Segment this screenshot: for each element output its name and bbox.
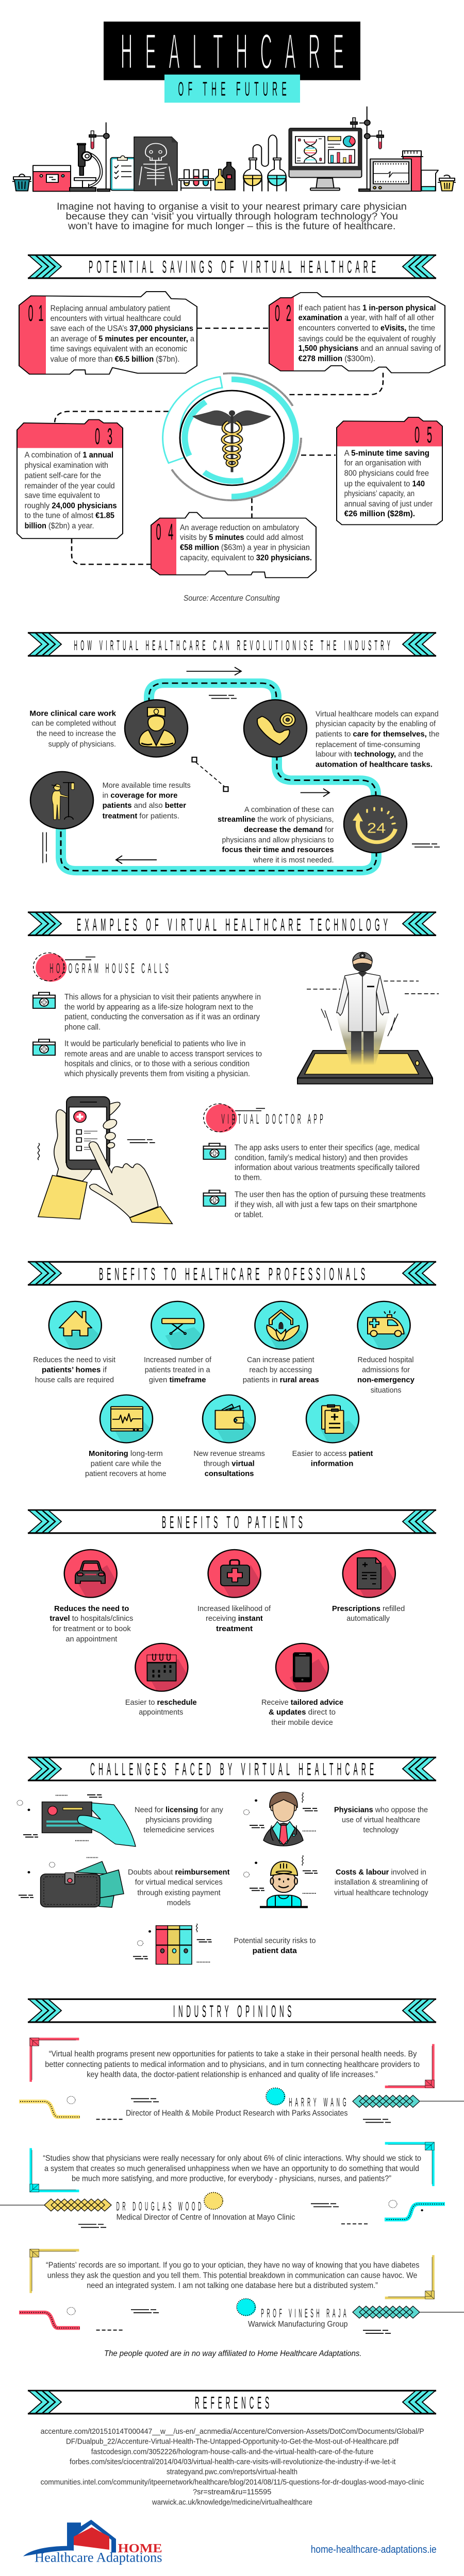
section banner: industry opinions: INDUSTRY OPINIONS: [173, 2003, 291, 2021]
icon: retort stand right: [351, 107, 384, 191]
speaker: Harry Wang: Director of Health & Mobile Product Research with Parks Associates: [126, 2109, 347, 2117]
benefit: reschedule: Easier to reschedule: [125, 1698, 197, 1707]
quote: Vinesh Raja: [29, 2249, 464, 2329]
panel: saving 02: 02: [275, 301, 291, 326]
speaker: Douglas Wood: Medical Director of Centre of Innovation at Mayo Clinic: [117, 2213, 295, 2222]
icon: nurse: [125, 700, 188, 757]
benefit: patients homes: patients’ homes if: [42, 1366, 107, 1374]
benefit: revenue: [193, 1395, 265, 1478]
text: app description 1: [235, 1143, 420, 1182]
section banner: examples: EXAMPLES OF VIRTUAL HEALTHCARE TECHNOLOGY: [77, 916, 388, 935]
text: hologram description 1: the world by appearing as a life-size hologram next to the: [64, 1003, 253, 1011]
panel: saving 05: up the equivalent to 140: [344, 479, 425, 488]
subheading: virtual doctor app: VIRTUAL DOCTOR APP: [221, 1112, 323, 1127]
text: more available time: treatment for patients.: [103, 812, 179, 820]
icon: 24 hour clock: [344, 795, 407, 853]
panel: saving 02: [269, 291, 445, 375]
speaker: Douglas Wood: [0, 2192, 295, 2222]
illustration: hands holding phone: [38, 1097, 172, 1224]
challenge: licensing: Need for licensing for any: [135, 1806, 223, 1814]
text: expand physician capacity: Virtual healthcare models can expand: [316, 710, 439, 718]
icon: clipboards: [322, 1405, 343, 1433]
benefit: travel: [49, 1549, 133, 1643]
benefit: patients homes: Reduces the need to visit: [33, 1355, 116, 1364]
references list: DF/Dualpub_22/Accenture-Virtual-Health-The-Untapped-Opportunity-to-Get-the-Most-out-of-Healthcare.pdf: [66, 2437, 399, 2446]
challenge: reimbursement: for virtual medical services: [135, 1878, 223, 1887]
title: [104, 22, 360, 103]
text: app description 1: to them.: [235, 1173, 262, 1182]
intro text: won’t have to imagine for much longer – this is the future of healthcare.: [68, 221, 396, 232]
panel: saving 05: 05: [415, 422, 432, 448]
speaker: Douglas Wood: DR DOUGLAS WOOD: [117, 2199, 201, 2213]
references list: forbes.com/sites/ciocentral/2014/04/03/virtual-health-care-visits-will-revolutionize-the-industry-if-we-let-it: [70, 2458, 396, 2466]
benefit: monitoring: [85, 1395, 167, 1478]
references list: [41, 2428, 424, 2506]
text: hologram description 1: phone call.: [64, 1023, 101, 1031]
benefit: monitoring: patient care while the: [91, 1460, 161, 1468]
text: expand physician capacity: labour with technology, and the: [316, 750, 423, 759]
challenge: costs and labour: virtual healthcare technology: [334, 1889, 428, 1897]
text: hologram description 1: patient, conducting the conversation as if it was an ordinary: [64, 1012, 260, 1021]
panel: saving 03: billion ($2bn) a year.: [25, 521, 94, 530]
icon: bottles: [215, 162, 235, 190]
text: a combination of these: [218, 805, 334, 865]
benefit: patients homes: [33, 1301, 116, 1384]
panel: saving 03: patient self-care for the: [25, 471, 101, 480]
icon: smartphone: [293, 1653, 311, 1682]
benefit: revenue: New revenue streams: [193, 1450, 265, 1458]
benefit: tailored advice: their mobile device: [271, 1718, 333, 1727]
benefit: travel: an appointment: [65, 1635, 118, 1643]
benefit: non-emergency: non-emergency: [357, 1376, 415, 1384]
intro text: [57, 201, 407, 232]
speaker: Vinesh Raja: Warwick Manufacturing Group: [248, 2320, 348, 2329]
panel: saving 05: €26 million ($28m).: [344, 510, 415, 518]
text: more available time: More available time results: [103, 782, 191, 790]
disclaimer: The people quoted are in no way affiliated to Home Healthcare Adaptations.: [104, 2349, 362, 2358]
benefit: instant treatment: Increased likelihood of: [197, 1604, 271, 1613]
panel: saving 02: savings could be the equivalent of roughly: [299, 334, 436, 343]
icon: strong arm: [244, 700, 307, 757]
icon: red box: [33, 165, 71, 191]
benefit: tailored advice: Receive tailored advice: [261, 1698, 343, 1707]
icon: 24 hour clock: 24: [367, 820, 386, 836]
icon: microscope: [70, 143, 101, 191]
panel: saving 05: A 5-minute time saving: [344, 449, 429, 457]
section banner: industry opinions: [28, 1998, 436, 2023]
logo: Home Healthcare Adaptations: Healthcare Adaptations: [35, 2550, 162, 2565]
speaker: Harry Wang: HARRY WANG: [289, 2095, 346, 2109]
quote: Harry Wang: key health data, the doctor-patient relationship is enhanced and quality of life increases.”: [87, 2070, 378, 2079]
icon: folding table: [162, 1318, 195, 1334]
icon: medical bag: [33, 992, 55, 1008]
section banner: benefits to professionals: [28, 1261, 436, 1285]
challenge: licensing: [42, 1802, 223, 1846]
text: a combination of these: decrease the demand for: [244, 826, 334, 834]
title: HEALTHCARE: [121, 24, 344, 79]
panel: saving 03: A combination of 1 annual: [25, 451, 113, 460]
icon: ECG machine, bottle, beaker: [370, 151, 438, 191]
panel: saving 02: encounters converted to eVisits, the time: [299, 324, 435, 332]
panel: saving 01: save each of the USA’s 37,000 physicians: [51, 324, 193, 333]
references list: ?sr=stream&ru=115595: [193, 2488, 271, 2496]
panel: saving 04: visits by 5 minutes could add almost: [180, 533, 304, 542]
text: app description 1: condition, family’s medical history) and then provides: [235, 1154, 408, 1162]
panel: saving 03: 03: [95, 424, 112, 449]
text: hologram description 2: which physically prevents them from visiting a physician.: [64, 1070, 250, 1078]
flow path: [61, 683, 376, 871]
section banner: references: REFERENCES: [195, 2394, 269, 2413]
icon: ambulance: [368, 1311, 404, 1336]
quote: Harry Wang: [29, 2038, 464, 2117]
benefit: non-emergency: admissions for: [362, 1366, 410, 1374]
benefit: reschedule: appointments: [139, 1708, 183, 1717]
panel: saving 02: 1,500 physicians and an annual saving of: [299, 344, 441, 353]
challenge: opposing physicians: [263, 1792, 428, 1846]
benefit: non-emergency: situations: [371, 1386, 401, 1395]
subheading: hologram house calls: [34, 953, 169, 981]
benefit: non-emergency: Reduced hospital: [358, 1355, 414, 1364]
panel: saving 01: an average of 5 minutes per encounter, a: [51, 334, 195, 343]
challenge: patient data: [156, 1926, 316, 1964]
benefit: travel: travel to hospitals/clinics: [49, 1615, 133, 1623]
benefit: instant treatment: [197, 1549, 271, 1633]
text: a combination of these: physicians and allow physicians to: [222, 836, 334, 844]
benefit: rural areas: reach by accessing: [249, 1366, 312, 1374]
benefit: prescriptions: automatically: [346, 1615, 390, 1623]
text: expand physician capacity: automation of healthcare tasks.: [316, 760, 433, 769]
icon: medical bag: [33, 1039, 55, 1055]
challenge: costs and labour: installation & streamlining of: [335, 1878, 428, 1887]
panel: saving 03: roughly 24,000 physicians: [25, 501, 117, 510]
challenge: opposing physicians: technology: [363, 1826, 399, 1834]
benefit: tailored advice: & updates direct to: [269, 1708, 336, 1717]
section banner: benefits to patients: BENEFITS TO PATIENTS: [162, 1513, 303, 1532]
benefit: prescriptions: Prescriptions refilled: [332, 1604, 405, 1613]
text: hologram description 2: remote areas and are unable to access transport services to: [64, 1049, 262, 1058]
panel: saving 02: examination a year, with half of all other: [299, 313, 435, 322]
text: expand physician capacity: replacement of time-consuming: [316, 740, 420, 749]
panel: saving 04: [150, 511, 316, 579]
panel: saving 04: capacity, equivalent to 320 physicians.: [180, 553, 312, 562]
challenge: licensing: physicians providing: [145, 1816, 212, 1824]
benefit: timeframe: Increased number of: [144, 1355, 212, 1364]
benefit: reschedule: [125, 1643, 197, 1717]
text: a combination of these: focus their time and resources: [222, 846, 334, 854]
icon: retort stand left: [89, 123, 110, 191]
text: more clinical care work: supply of physicians.: [48, 740, 116, 749]
section banner: references: [28, 2390, 436, 2414]
benefit: patient information: [292, 1395, 373, 1468]
panel: saving 05: physicians’ capacity, an: [344, 489, 415, 498]
icon: rural home with leaves: [267, 1310, 299, 1341]
challenge: patient data: Potential security risks to: [234, 1937, 316, 1945]
icon: binders: [156, 1926, 192, 1964]
benefit: patients homes: house calls are required: [35, 1376, 114, 1384]
benefit: instant treatment: receiving instant: [206, 1615, 263, 1623]
references list: warwick.ac.uk/knowledge/medicine/virtualhealthcare: [152, 2498, 312, 2506]
challenge: reimbursement: [41, 1861, 230, 1907]
section banner: challenges: CHALLENGES FACED BY VIRTUAL HEALTHCARE: [90, 1760, 374, 1780]
quote: Douglas Wood: be much more satisfying, and more productive, for everybody - physicians, nurses, and patients?”: [72, 2174, 391, 2183]
text: more available time: [103, 782, 191, 820]
text: app description 1: information about various treatments specifically tailored: [235, 1163, 420, 1172]
logo: Home Healthcare Adaptations: HOME: [118, 2541, 162, 2555]
icon: medical bag: [203, 1143, 226, 1159]
chart: caduceus ring: [163, 374, 301, 500]
text: a combination of these: streamline the work of physicians,: [218, 816, 334, 824]
panel: saving 01: [19, 291, 197, 375]
section banner: how virtual healthcare can revolutionise: [28, 632, 436, 657]
benefit: monitoring: patient recovers at home: [85, 1470, 167, 1478]
section banner: examples: [28, 911, 436, 936]
icon: patient with drip: [30, 772, 93, 829]
panel: saving 01: encounters with virtual healthcare could: [51, 314, 181, 323]
text: more clinical care work: can be completed without: [31, 719, 117, 727]
logo: Home Healthcare Adaptations: [23, 2520, 162, 2565]
panel: saving 04: 04: [156, 519, 173, 545]
challenge: reimbursement: Doubts about reimbursement: [128, 1868, 230, 1876]
subheading: virtual doctor app: [204, 1104, 323, 1132]
challenge: opposing physicians: use of virtual healthcare: [342, 1816, 420, 1824]
text: hologram description 1: [64, 992, 261, 1031]
icon: wallet: [216, 1404, 244, 1429]
text: more clinical care work: the need to increase the: [37, 730, 116, 738]
panel: saving 02: €278 million ($300m).: [299, 354, 375, 363]
quote: Douglas Wood: [0, 2142, 435, 2222]
arrow: bottom: [116, 856, 157, 863]
panel: saving 02: If each patient has 1 in-person physical: [299, 303, 436, 312]
text: hologram description 2: hospitals and clinics, or to those with a serious condition: [64, 1059, 250, 1068]
challenge: opposing physicians: Physicians who oppose the: [334, 1806, 428, 1814]
panel: saving 04: €58 million ($63m) a year in physician: [180, 543, 310, 552]
intro text: Imagine not having to organise a visit to your nearest primary care physician: [57, 201, 407, 212]
text: app description 2: if they wish, all with just a few taps on their smartphone: [235, 1200, 417, 1209]
benefit: instant treatment: treatment: [216, 1624, 253, 1633]
icon: calendar: [147, 1654, 176, 1681]
benefit: patient information: information: [311, 1460, 353, 1468]
icon: x-ray sheet: [134, 137, 177, 191]
icon: heart monitor: [111, 1406, 143, 1431]
text: hologram description 2: [64, 1039, 262, 1078]
benefit: travel: for treatment or to book: [53, 1624, 131, 1633]
text: more available time: in coverage for more: [103, 791, 178, 800]
panel: saving 03: [15, 417, 124, 538]
text: a combination of these: A combination of these can: [244, 805, 334, 814]
section banner: how virtual healthcare can revolutionise: HOW VIRTUAL HEALTHCARE CAN REVOLUTIONISE THE INDUSTRY: [74, 638, 390, 654]
icon: prescription: [357, 1558, 381, 1589]
benefit: rural areas: patients in rural areas: [243, 1376, 319, 1384]
text: app description 1: The app asks users to enter their specifics (age, medical: [235, 1143, 420, 1152]
speaker: Vinesh Raja: [237, 2299, 464, 2329]
text: more clinical care work: [29, 709, 117, 749]
benefit: revenue: through virtual: [204, 1460, 255, 1468]
icon: test tubes: [179, 170, 213, 191]
references list: strategyand.pwc.com/reports/virtual-health: [167, 2468, 297, 2476]
benefit: non-emergency: [357, 1301, 415, 1395]
section banner: potential savings: [28, 255, 436, 279]
panel: saving 01: time savings equivalent with an economic: [51, 345, 187, 353]
subheading: hologram house calls: HOLOGRAM HOUSE CALLS: [49, 961, 169, 976]
icon: first aid kit: [221, 1560, 250, 1586]
challenge: patient data: patient data: [253, 1947, 297, 1955]
challenge: reimbursement: models: [167, 1899, 191, 1907]
text: more available time: patients and also better: [103, 802, 186, 810]
title: OF THE FUTURE: [178, 78, 287, 100]
source note: Source: Accenture Consulting: [184, 594, 280, 603]
panel: saving 05: for an organisation with: [344, 459, 421, 468]
panel: saving 03: physical examination with: [25, 461, 108, 470]
references list: fastcodesign.com/3052226/hologram-house-calls-and-the-virtual-health-care-of-the-future: [91, 2448, 374, 2456]
panel: saving 03: save time equivalent to: [25, 491, 100, 500]
icon: flasks and tube: [243, 135, 286, 191]
section banner: benefits to professionals: BENEFITS TO HEALTHCARE PROFESSIONALS: [99, 1265, 365, 1284]
illustration: laboratory equipment: [12, 107, 456, 191]
panel: saving 03: to the tune of almost €1.85: [25, 511, 114, 520]
panel: saving 04: An average reduction on ambulatory: [180, 523, 300, 532]
arrow: top: [187, 667, 241, 675]
challenge: licensing: telemedicine services: [143, 1826, 214, 1834]
text: expand physician capacity: patients to care for themselves, the: [316, 730, 440, 738]
text: hologram description 1: This allows for a physician to visit their patients anywhere in: [64, 992, 261, 1002]
icon: yellow bin: [438, 175, 456, 191]
benefit: patient information: Easier to access patient: [292, 1450, 373, 1458]
section banner: potential savings: POTENTIAL SAVINGS OF VIRTUAL HEALTHCARE: [89, 258, 376, 277]
challenge: reimbursement: through existing payment: [137, 1889, 221, 1897]
benefit: rural areas: [243, 1301, 319, 1384]
speaker: Vinesh Raja: PROF VINESH RAJA: [261, 2307, 346, 2320]
challenge: costs and labour: [260, 1861, 428, 1908]
text: expand physician capacity: physician capacity by the enabling of: [316, 720, 436, 728]
icon: hand holding licence card: [42, 1802, 136, 1846]
section banner: challenges: [28, 1757, 436, 1781]
panel: saving 01: value of more than €6.5 billion ($7bn).: [51, 355, 179, 364]
section banner: benefits to patients: [28, 1510, 436, 1534]
intro text: because they can ‘visit’ you virtually through hologram technology? You: [66, 211, 398, 222]
benefit: timeframe: [144, 1301, 212, 1384]
illustration: hologram doctor on tablet: [297, 952, 433, 1084]
text: hologram description 2: It would be particularly beneficial to patients who live in: [64, 1039, 246, 1048]
benefit: prescriptions: [332, 1549, 405, 1623]
text: expand physician capacity: [316, 710, 440, 769]
benefit: travel: Reduces the need to: [54, 1604, 129, 1613]
panel: saving 01: 01: [28, 301, 43, 326]
text: more clinical care work: More clinical care work: [29, 709, 116, 718]
panel: saving 05: 800 physicians could free: [344, 469, 429, 478]
benefit: rural areas: Can increase patient: [247, 1355, 314, 1364]
icon: car: [75, 1561, 105, 1583]
icon: house: [59, 1311, 92, 1336]
panel: saving 05: annual saving of just under: [344, 500, 433, 509]
icon: caduceus: [193, 410, 271, 472]
icon: medical bag: [203, 1190, 226, 1206]
speaker: Harry Wang: [126, 2088, 464, 2117]
text: a combination of these: where it is most needed.: [253, 856, 334, 865]
text: app description 2: The user then has the option of pursuing these treatments: [235, 1190, 426, 1199]
panel: saving 03: remainder of the year could: [25, 481, 115, 490]
text: app description 2: or tablet.: [235, 1210, 263, 1219]
benefit: tailored advice: [261, 1643, 343, 1727]
benefit: revenue: consultations: [205, 1470, 254, 1478]
icon: engineer: [260, 1861, 307, 1908]
panel: saving 05: [335, 415, 443, 524]
icon: physician: [263, 1792, 303, 1846]
benefit: monitoring: Monitoring long-term: [89, 1450, 163, 1458]
icon: wallet with banknotes: [41, 1861, 124, 1907]
challenge: costs and labour: Costs & labour involved in: [336, 1868, 426, 1876]
icon: clipboard: [110, 156, 135, 190]
quote: Vinesh Raja: need an integrated system. I am not talking one database here but a distributed system.”: [87, 2281, 378, 2290]
icon: monitor with DNA: [289, 128, 362, 190]
text: app description 2: [235, 1190, 426, 1219]
benefit: timeframe: patients treated in a: [145, 1366, 210, 1374]
icon: teal bin: [12, 174, 31, 191]
arrow: middle: [301, 789, 329, 796]
benefit: timeframe: given timeframe: [149, 1376, 206, 1384]
panel: saving 01: Replacing annual ambulatory patient: [51, 304, 170, 313]
